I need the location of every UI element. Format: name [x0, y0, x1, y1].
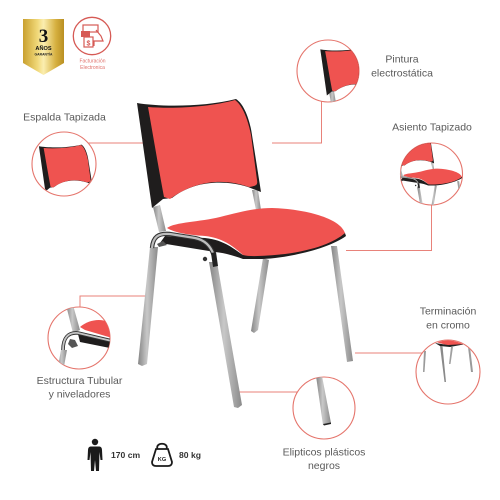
- icon: electronic invoicing: $: [87, 40, 91, 48]
- detail circle: elipticos: [293, 376, 355, 439]
- text: facturacion electronica: Electronica: [80, 65, 105, 71]
- label: asiento tapizado: Asiento Tapizado: [392, 122, 472, 134]
- warranty badge: 3: [39, 26, 48, 47]
- label: pintura electrostatica: Pintura: [385, 54, 419, 66]
- label: elipticos plasticos: [283, 446, 365, 472]
- icon: electronic invoicing: [73, 17, 111, 55]
- warranty badge: GARANTÍA: [35, 52, 53, 56]
- label: terminacion en cromo: en cromo: [426, 320, 470, 332]
- text: facturacion electronica: [79, 58, 106, 71]
- label: estructura tubular: y niveladores: [49, 388, 110, 400]
- label: estructura tubular: [37, 375, 123, 400]
- text: height: 170 cm: [111, 450, 141, 460]
- label: espalda tapizada: Espalda Tapizada: [23, 112, 106, 124]
- icon: weight: KG: [158, 457, 166, 463]
- connector lines: [80, 101, 432, 392]
- label: estructura tubular: Estructura Tubular: [37, 375, 123, 387]
- icon: person: [88, 439, 102, 471]
- warranty badge: [23, 19, 64, 75]
- label: elipticos plasticos: Elipticos plásticos: [283, 446, 365, 458]
- detail circle: terminacion: [416, 340, 480, 404]
- label: terminacion en cromo: Terminación: [420, 306, 476, 318]
- warranty badge: AÑOS: [35, 45, 52, 52]
- detail circle: estructura tubular: [48, 305, 112, 372]
- text: facturacion electronica: Facturación: [79, 58, 106, 64]
- detail circle: asiento: [400, 142, 464, 206]
- label: pintura electrostatica: [371, 54, 433, 80]
- label: elipticos plasticos: negros: [308, 460, 340, 472]
- detail circle: espalda: [32, 132, 96, 196]
- text: weight: 80 kg: [179, 450, 201, 460]
- detail circle: pintura: [296, 40, 360, 102]
- label: pintura electrostatica: electrostática: [371, 68, 433, 80]
- icon: weight: [152, 444, 172, 466]
- main chair illustration: [137, 99, 353, 408]
- label: terminacion en cromo: [420, 306, 476, 332]
